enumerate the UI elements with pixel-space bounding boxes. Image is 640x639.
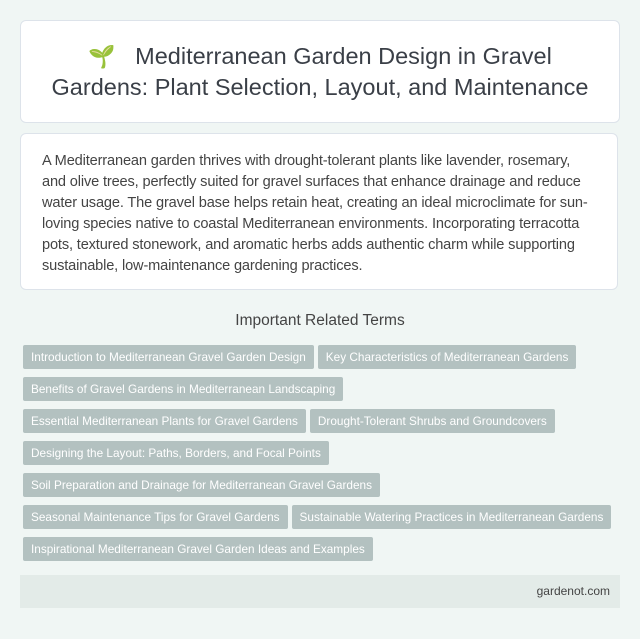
tags list: Introduction to Mediterranean Gravel Garden Design [31,350,306,364]
title card [20,20,620,123]
tags list: Benefits of Gravel Gardens in Mediterranean Landscaping [31,382,335,396]
tags list [23,345,611,561]
tags list: Designing the Layout: Paths, Borders, and Focal Points [31,446,321,460]
tags list: Seasonal Maintenance Tips for Gravel Gardens [31,510,280,524]
tags list: Key Characteristics of Mediterranean Gardens [326,350,568,364]
tags list: Essential Mediterranean Plants for Gravel Gardens [31,414,298,428]
description text: A Mediterranean garden thrives with drought-tolerant plants like lavender, rosemary, and olive trees, perfectly suited for gravel surfaces that enhance drainage and reduce water usage. The gravel base helps retain heat, creating an ideal microclimate for sun-loving species native to coastal Mediterranean environments. Incorporating terracotta pots, textured stonework, and aromatic herbs adds authentic charm while supporting sustainable, low-maintenance gardening practices. [42,153,588,274]
tags list: Sustainable Watering Practices in Mediterranean Gardens [300,510,603,524]
title card: Gardens: Plant Selection, Layout, and Maintenance [52,74,588,100]
title card: 🌱 Mediterranean Garden Design in Gravel [88,43,552,69]
footer: gardenot.com [537,584,610,598]
tags list: Soil Preparation and Drainage for Mediterranean Gravel Gardens [31,478,372,492]
footer [20,575,620,608]
tags list: Drought-Tolerant Shrubs and Groundcovers [318,414,547,428]
tags list: Inspirational Mediterranean Gravel Garden Ideas and Examples [31,542,365,556]
heading: related terms: Important Related Terms [235,312,405,329]
